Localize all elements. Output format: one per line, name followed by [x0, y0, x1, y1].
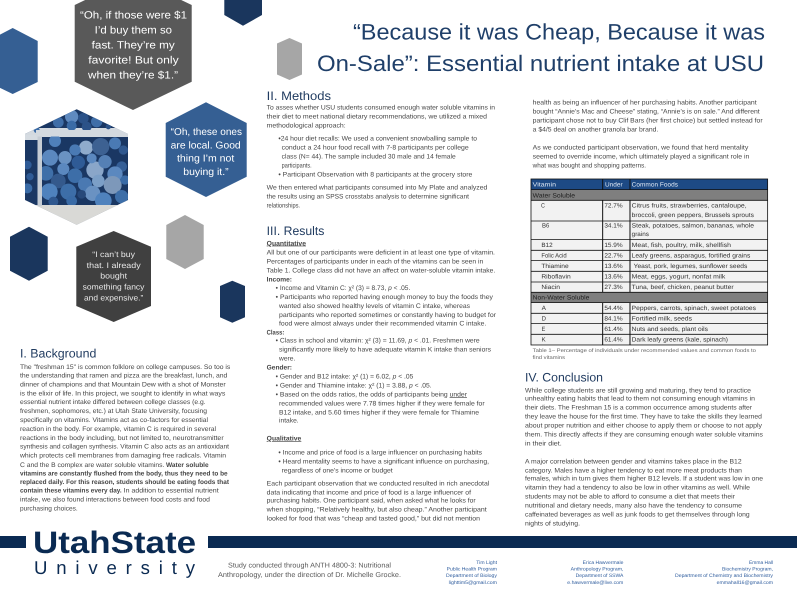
text block: quantitative results: Percentages of participants under in each of the vitamins can be seen in [267, 258, 483, 265]
text block: background [20, 363, 230, 512]
text block: qualitative results: • Income and price of food is a large influencer on purchasing habits [278, 449, 482, 456]
text block: conclusion: females, which in turn gives them higher B12 levels. If a student was low in one [525, 475, 763, 482]
text block: methods: participants. [282, 162, 312, 169]
text block: conclusion: A major correlation between gender and vitamins takes place in the B12 [525, 458, 742, 465]
quote hexagon: fancy and expensive [76, 231, 151, 322]
title: On-Sale”: Essential nutrient intake at USU [317, 51, 764, 76]
text block: quantitative results: wanted also showed healthy levels of vitamin C intake, whereas [279, 302, 470, 310]
table group: water soluble: 27.3% [604, 283, 623, 290]
text block: conclusion: students may not be able to afford to consume a diet that meets their [525, 493, 735, 500]
text block: class and gender results: significantly more likely to have adequate vitamin K intake than seniors [279, 346, 491, 353]
text block: quantitative results [267, 240, 496, 336]
table caption: Table 1– Percentage of individuals under recommended values and common foods to [533, 348, 756, 353]
text block: qualitative continued: seemed to override income, which ultimately played a significant role in [533, 153, 749, 160]
text block: background: dinner of champions and that Mountain Dew with a shot of Monster [20, 381, 226, 388]
logo: Utah State University: University [34, 557, 196, 578]
table group: non-water soluble: Nuts and seeds, plant oils [632, 325, 708, 332]
text block: conclusion [525, 387, 763, 527]
section: qualitative continued and vitamin table [531, 99, 768, 360]
quote hexagon: one dollar: favorite! But only [88, 55, 180, 67]
hexagon: small navy [220, 281, 245, 323]
table group: water soluble: Meat, fish, poultry, milk, shellfish [632, 241, 731, 248]
text block: background: C and the B complex are water soluble vitamins. [20, 461, 164, 469]
text block: quantitative results: participants who reported sometimes or constantly having to budget for [279, 311, 496, 319]
text block: conclusion: their diets. The Freshman 15 is a common occurrence among students after [525, 404, 752, 411]
author: Tim Light: Public Health Program [447, 566, 497, 572]
author: Erica Hawvermale: Erica Hawvermale [583, 560, 624, 566]
text block: qualitative continued: health as being an influencer of her purchasing habits. Another participant [533, 99, 757, 106]
quote hexagon: one dollar [75, 0, 192, 110]
text block: qualitative results [266, 435, 489, 522]
text block: conclusion: category. Males have a higher tendency to eat more meat products than [525, 467, 742, 474]
text block: quantitative results: food were almost always under their recommended vitamin C intake. [279, 320, 486, 327]
text block: qualitative results: when shopping, “Relatively healthy, but also cheap.” Another participant [266, 506, 487, 513]
title: “Because it was Cheap, Because it was [353, 20, 765, 44]
table group: water soluble: 72.7% [604, 202, 623, 209]
title [317, 20, 765, 76]
quote hexagon: fancy and expensive: and expensive.” [84, 294, 144, 303]
author: Tim Light: Department of Biology [446, 573, 498, 579]
text block: qualitative results: Qualitative [267, 435, 301, 442]
text block: qualitative continued: As we conducted participant observation, we found that herd mentality [533, 144, 748, 151]
text block: background: The "freshman 15" is common folklore on college campuses. So too is [20, 363, 230, 371]
text block: conclusion: While college students are still growing and maturing, they tend to practice [525, 387, 751, 394]
table caption [533, 348, 756, 360]
table group: non-water soluble: Non-Water Soluble [533, 294, 589, 301]
table group: non-water soluble: K [542, 336, 546, 343]
text block: qualitative continued: participant chose not to buy Clif Bars (her first choice) but settled instead for [533, 117, 763, 124]
section: conclusion [525, 371, 763, 527]
table group: water soluble: Folic Acid [541, 252, 567, 259]
text block: class and gender results: • Gender and B12 intake: χ² (1) = 6.02, p < .05 [276, 373, 413, 380]
table caption: find vitamins [533, 355, 565, 360]
text block: qualitative results: looked for food that was “cheap and tasted good,” but did not mention [267, 515, 480, 522]
text block: conclusion: nights of studying. [525, 520, 580, 527]
text block: qualitative results: purchasing habits. One participant said, when asked what he looks for [267, 497, 476, 504]
text block: background: synthesis and collagen synthesis. Vitamin C also acts as an antioxidant [20, 443, 229, 450]
quote hexagon: fancy and expensive: that. I already [87, 261, 141, 270]
table group: non-water soluble [533, 294, 756, 343]
quote hexagon: fancy and expensive: bought [100, 272, 128, 281]
text block: quantitative results: Income: [267, 276, 292, 283]
table group: water soluble: 15.9% [604, 241, 623, 248]
table group: non-water soluble: E [542, 325, 545, 332]
text block: conclusion: about proper nutrition and either choose to apply them or choose to not apply [525, 422, 762, 429]
table header: Vitamin [533, 181, 556, 188]
table group: non-water soluble: A [542, 304, 546, 311]
author: Erica Hawvermale: e.hawvermale@live.com [567, 580, 623, 586]
text block: methods: their diet to meet national dietary recommendations, we utilized a mixed [267, 113, 487, 120]
table group: water soluble: Meat, eggs, yogurt, nonfat milk [632, 273, 726, 280]
table group: non-water soluble: Dark leafy greens (kale, spinach) [632, 336, 728, 343]
author: Emma Hall: Emma Hall [749, 560, 773, 566]
table group: water soluble: Thiamine [541, 262, 569, 269]
hexagon: blue left [0, 28, 38, 94]
text block: class and gender results: were. [279, 355, 295, 362]
table group: non-water soluble: 54.4% [604, 304, 623, 311]
text block: quantitative results: Class: [267, 329, 284, 336]
text block: quantitative results: All but one of our participants were deficient in at least one type of vitamin. [267, 249, 495, 256]
text block: conclusion: in their diet. [525, 440, 562, 447]
quote hexagon: local [166, 102, 247, 197]
table group: non-water soluble: 61.4% [604, 336, 623, 343]
text block: qualitative results: data indicating that income and price of food is a large influencer of [267, 489, 471, 496]
table group: non-water soluble: D [542, 315, 546, 322]
footer bar: right [208, 536, 797, 548]
quote hexagon: fancy and expensive: something fancy [83, 283, 144, 292]
text block: quantitative results: Table 1. College class did not have an affect on water-soluble vitamin intake. [267, 267, 495, 274]
logo: Utah State University: UtahState [33, 525, 196, 560]
author: Emma Hall: emmahall16@gmail.com [717, 580, 773, 586]
text block: class and gender results: • Based on the odds ratios, the odds of participants being under [276, 391, 467, 398]
text block: methods: conduct a 24 hour food recall with 7-8 participants per college [282, 144, 469, 151]
logo: Utah State University [33, 525, 196, 578]
text block: conclusion: unhealthy eating habits that lead to them not consuming enough vitamins in [525, 395, 755, 402]
text block: methods: relationships. [267, 202, 300, 209]
text block: conclusion: nutritional and dietary needs, many also have the tendency to consume [525, 502, 742, 509]
text block: class and gender results: • Gender and Thiamine intake: χ² (1) = 3.88, p < .05. [276, 382, 432, 389]
table group: water soluble: Steak, potatoes, salmon, bananas, whole [632, 222, 754, 229]
table group: water soluble [533, 192, 754, 290]
table header: Under [605, 181, 623, 188]
heading: background: I. Background [20, 347, 96, 360]
text block: methods: the results using an SPSS crosstabs analysis to determine significant [267, 193, 469, 200]
author: Erica Hawvermale: Department of SSWA [576, 573, 624, 579]
quote hexagon: one dollar: when they’re $1.” [87, 70, 179, 82]
text block: methods: •24 hour diet recalls: We used a convenient snowballing sample to [278, 135, 477, 142]
text block: class and gender results: intake. [279, 417, 299, 424]
table group: water soluble: Yeast, pork, legumes, sunflower seeds [634, 262, 747, 269]
text block: methods: class (N= 44). The sample included 30 male and 14 female [282, 153, 456, 160]
text block: qualitative results: • Heard mentality seems to have a significant influence on purchasing, [278, 458, 489, 465]
table group: water soluble: Leafy greens, asparagus, fortified grains [632, 252, 750, 259]
table group: water soluble: Water Soluble [533, 192, 575, 199]
author: Erica Hawvermale [567, 560, 624, 586]
author: Tim Light: Tim Light [476, 560, 498, 566]
text block: background: purchasing choices. [20, 505, 78, 512]
table group: water soluble: Riboflavin [541, 273, 571, 280]
heading: results: III. Results [267, 224, 324, 238]
text block: qualitative results: Each participant observation that we conducted resulted in rich anecdotal [267, 480, 489, 487]
quote hexagon: local: buying it.” [183, 167, 229, 178]
text block: background: essential nutrient intake differed between college classes (e.g. [20, 398, 206, 406]
table group: water soluble: 13.6% [604, 273, 623, 280]
table group: water soluble: C [541, 202, 545, 209]
table group: water soluble: Citrus fruits, strawberries, cantaloupe, [632, 202, 747, 209]
author: Emma Hall: Department of Chemistry and Biochemistry [675, 573, 774, 579]
text block: background: which protects cell membranes from damaging free radicals. Vitamin [20, 452, 226, 459]
text block: background: specifically on vitamins. Vitamins act as co-factors for essential [20, 416, 208, 424]
heading: methods: II. Methods [267, 89, 331, 103]
text block: conclusion: caffeinated beverages as well as junk foods to get themselves through long [525, 511, 750, 518]
table group: water soluble: B12 [541, 241, 553, 248]
quote hexagon: local: “Oh, these ones [171, 127, 242, 138]
text block: class and gender results: Gender: [267, 364, 292, 371]
text block: conclusion: vitamin they had a tendency to also be low in other vitamins as well. While [525, 484, 750, 491]
hexagon: navy top [224, 0, 262, 26]
author: Tim Light [446, 560, 498, 586]
text block: class and gender results: • Class in school and vitamin: χ² (3) = 11.69, p < .01. Freshmen were [276, 337, 480, 344]
quote hexagon: one dollar: “Oh, if those were $1 [80, 10, 187, 22]
quote hexagon: fancy and expensive: “I can’t buy [92, 250, 135, 259]
text block: methods: We then entered what participants consumed into My Plate and analyzed [267, 184, 487, 191]
text block: qualitative results: regardless of one’s income or budget [282, 467, 393, 474]
quote hexagon: one dollar: I’d buy them so [95, 25, 172, 37]
quote hexagon: local: thing I’m not [177, 154, 235, 165]
author: Tim Light: lighttim5@gmail.com [449, 580, 497, 586]
quote hexagon: one dollar: fast. They’re my [92, 40, 175, 52]
author: Emma Hall: Biochemistry Program, [722, 566, 773, 572]
text block: quantitative results: Quantitative [267, 240, 306, 247]
table group: non-water soluble: Peppers, carrots, spinach, sweet potatoes [632, 304, 756, 311]
table header: Common Foods [632, 181, 678, 188]
text block: background: reactions in the body including, but not limited to, neurotransmitter [20, 434, 224, 442]
photo: blueberries in hexagon [22, 109, 130, 225]
table group: water soluble: Tuna, beef, chicken, peanut butter [632, 283, 734, 290]
quote hexagon: local: are local. Good [171, 140, 241, 151]
text block: qualitative continued [532, 99, 763, 169]
text block: background: the understanding that ramen and pizza are the breakfast, lunch, and [20, 372, 227, 379]
table group: non-water soluble: 61.4% [604, 325, 623, 332]
text block: background: vitamins are constantly flushed from the body, thus they need to be [20, 470, 228, 477]
hexagon: light gray [166, 215, 204, 269]
text block: background: Water soluble [166, 461, 209, 469]
table group: water soluble: broccoli, green peppers, Brussels sprouts [632, 211, 754, 218]
table group: water soluble: Niacin [541, 283, 560, 290]
text block: class and gender results [267, 337, 491, 424]
text block: background: is the elixir of life. In this project, we sought to identify in what ways [20, 390, 225, 397]
table: vitamins, percent under and common foods [531, 179, 768, 345]
text block: background: contain these vitamins every day. [20, 487, 122, 494]
table group: water soluble: grains [632, 230, 649, 237]
section: background [20, 347, 230, 512]
text block: class and gender results: B12 intake, and 5.60 times higher if they were female for Thiamine [279, 409, 479, 416]
text block: class and gender results: recommended values were 7.78 times higher if they were female for [279, 400, 485, 407]
author: Emma Hall [675, 560, 774, 586]
text block: background: freshmen, sophomores, etc.) at Utah State University, focusing [20, 407, 207, 415]
text block: methods: To asses whether USU students consumed enough water soluble vitamins in [267, 104, 495, 111]
text block: conclusion: them. This directly affects if they are consuming enough water soluble vitamins [525, 431, 763, 438]
text block: background: replaced daily. For this reason, students should be eating foods that [20, 478, 229, 486]
text block: qualitative continued: what was bought and shopping patterns. [532, 162, 646, 169]
table group: non-water soluble: 84.1% [604, 315, 623, 322]
text block: study credit: Study conducted through ANTH 4800-3: Nutritional [228, 562, 391, 570]
text block: methods: methodological approach: [267, 122, 346, 129]
footer bar: left [0, 536, 26, 548]
table group: water soluble: 13.6% [604, 262, 623, 269]
hexagon: gray beside title [277, 38, 302, 80]
text block: background: intake, we also found interactions between food costs and food [20, 496, 210, 503]
text block: qualitative continued: a $4/5 deal on another granola bar brand. [533, 126, 658, 133]
heading: conclusion: IV. Conclusion [525, 371, 603, 384]
text block: background: reaction in the body. For example, vitamin C is required in several [20, 425, 216, 433]
text block: methods: • Participant Observation with 8 participants at the grocery store [278, 171, 472, 178]
table header [533, 181, 678, 188]
text block: background: In addition to essential nutrient [124, 487, 219, 494]
text block: study credit: Anthropology, under the direction of Dr. Michelle Grocke. [218, 571, 401, 579]
text block: quantitative results: • Income and Vitamin C: χ² (3) = 8.73, p < .05. [276, 284, 410, 292]
hexagon: navy lower left [10, 227, 48, 281]
author: Erica Hawvermale: Anthropology Program, [571, 566, 623, 572]
text block: conclusion: they leave the house for the first time. They have to take the skills they learned [525, 413, 762, 420]
table group: water soluble: 34.1% [604, 222, 623, 229]
text block: study credit [218, 562, 401, 579]
table group: non-water soluble: Fortified milk, seeds [632, 315, 692, 322]
text block: methods [267, 104, 495, 209]
text block: qualitative continued: bought “Annie’s Mac and Cheese” stating, “Annie’s is on sale.” And different [533, 108, 760, 115]
section: class, gender and qualitative results [266, 337, 491, 522]
section: methods and quantitative results [267, 89, 496, 336]
text block: quantitative results: • Participants who reported having enough money to buy the foods they [276, 293, 493, 301]
table group: water soluble: B6 [542, 222, 549, 229]
table group: water soluble: 22.7% [604, 252, 623, 259]
